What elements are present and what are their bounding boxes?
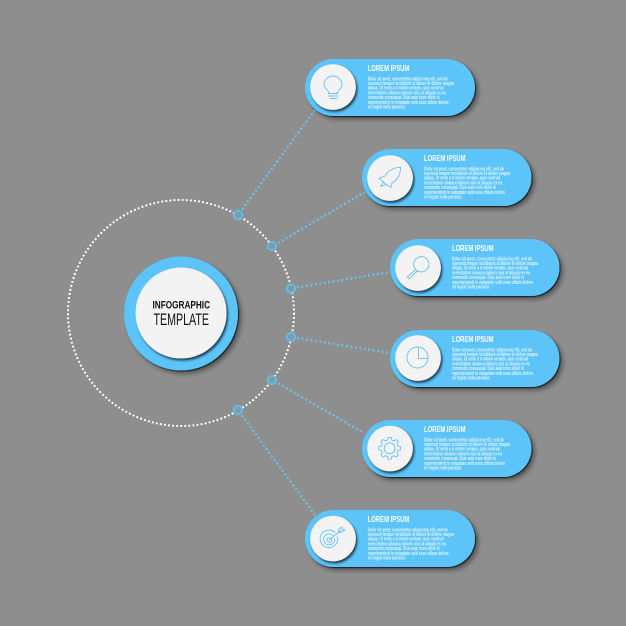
body text <box>424 166 510 200</box>
body text: exercitation ullamco laboris nisi ut aliquip ex ea <box>368 90 446 96</box>
body text: commodo consequat. Duis aute irure dolor in <box>424 185 496 191</box>
body text: reprehenderit in voluptate velit esse cillum dolore <box>424 190 505 196</box>
body text: exercitation ullamco laboris nisi ut aliquip ex ea <box>452 270 530 276</box>
body text: commodo consequat. Duis aute irure dolor in <box>424 456 496 462</box>
icon: gear <box>379 437 401 459</box>
heading: LOREM IPSUM <box>452 334 494 344</box>
body text <box>368 76 454 110</box>
body text: commodo consequat. Duis aute irure dolor in <box>368 95 440 101</box>
body text: commodo consequat. Duis aute irure dolor in <box>368 546 440 552</box>
dotted outer ring <box>68 200 294 426</box>
body text: eiusmod tempor incididunt ut labore et dolore magna <box>452 261 538 267</box>
body text: exercitation ullamco laboris nisi ut aliquip ex ea <box>452 361 530 367</box>
body text: eu fugiat nulla pariatur. <box>424 194 462 200</box>
card 4: chart <box>390 330 560 387</box>
heading: LOREM IPSUM <box>368 63 409 73</box>
body text: exercitation ullamco laboris nisi ut aliquip ex ea <box>424 451 502 457</box>
body text: reprehenderit in voluptate velit esse cillum dolore <box>368 100 449 106</box>
heading: LOREM IPSUM <box>368 514 409 524</box>
body text: aliqua. Ut enim a d minim veniam, quis nostrud <box>424 447 500 453</box>
body text <box>452 347 538 382</box>
body text <box>452 256 538 290</box>
central circle <box>124 256 238 370</box>
body text: Dolor sit amet, consectetur adipiscing elit, sed do <box>452 347 532 353</box>
body text: eu fugiat nulla pariatur. <box>424 466 462 472</box>
body text <box>368 527 454 562</box>
body text: aliqua. Ut enim a d minim veniam, quis nostrud <box>452 266 528 272</box>
body text: eu fugiat nulla pariatur. <box>452 284 490 290</box>
body text: reprehenderit in voluptate velit esse cillum dolore <box>424 461 505 467</box>
body text: aliqua. Ut enim a d minim veniam, quis nostrud <box>424 176 500 182</box>
body text: commodo consequat. Duis aute irure dolor in <box>452 366 524 372</box>
body text: exercitation ullamco laboris nisi ut aliquip ex ea <box>424 180 502 186</box>
central title line 1: INFOGRAPHIC <box>152 300 210 312</box>
body text: aliqua. Ut enim a d minim veniam, quis nostrud <box>368 537 444 543</box>
body text: eu fugiat nulla pariatur. <box>368 104 406 110</box>
body text: eiusmod tempor incididunt ut labore et dolore magna <box>452 352 538 358</box>
body text: eu fugiat nulla pariatur. <box>368 556 406 562</box>
icon: rocket <box>379 167 401 188</box>
card 1: idea <box>305 59 475 116</box>
icon: light bulb <box>324 76 342 98</box>
body text <box>424 437 510 472</box>
body text: aliqua. Ut enim a d minim veniam, quis nostrud <box>368 86 444 92</box>
card 5: settings <box>362 420 532 477</box>
body text: exercitation ullamco laboris nisi ut aliquip ex ea <box>368 541 446 547</box>
body text: reprehenderit in voluptate velit esse cillum dolore <box>368 551 449 557</box>
body text: eiusmod tempor incididunt ut labore et dolore magna <box>368 81 454 87</box>
card 3: search <box>390 239 560 296</box>
body text: Dolor sit amet, consectetur adipiscing elit, sed do <box>368 527 448 533</box>
body text: Dolor sit amet, consectetur adipiscing elit, sed do <box>452 256 532 262</box>
heading: LOREM IPSUM <box>452 243 494 253</box>
central title line 2: TEMPLATE <box>154 310 209 329</box>
body text: Dolor sit amet, consectetur adipiscing elit, sed do <box>424 166 504 172</box>
body text: reprehenderit in voluptate velit esse cillum dolore <box>452 280 533 286</box>
body text: aliqua. Ut enim a d minim veniam, quis nostrud <box>452 357 528 363</box>
body text: commodo consequat. Duis aute irure dolor in <box>452 275 524 281</box>
body text: reprehenderit in voluptate velit esse cillum dolore <box>452 371 533 377</box>
body text: eiusmod tempor incididunt ut labore et dolore magna <box>424 171 510 177</box>
heading: LOREM IPSUM <box>424 424 466 434</box>
icon: target with arrow <box>320 527 345 548</box>
body text: eiusmod tempor incididunt ut labore et dolore magna <box>424 442 510 448</box>
body text: Dolor sit amet, consectetur adipiscing elit, sed do <box>368 76 448 82</box>
heading: LOREM IPSUM <box>424 153 466 163</box>
body text: eu fugiat nulla pariatur. <box>452 376 490 382</box>
ring nodes <box>234 211 295 414</box>
card 6: target <box>305 510 475 567</box>
body text: eiusmod tempor incididunt ut labore et dolore magna <box>368 532 454 538</box>
connector lines <box>242 110 390 515</box>
icon: pie chart <box>407 347 428 368</box>
body text: Dolor sit amet, consectetur adipiscing elit, sed do <box>424 437 504 443</box>
icon: magnifier <box>407 257 429 279</box>
card 2: rocket <box>362 149 532 206</box>
